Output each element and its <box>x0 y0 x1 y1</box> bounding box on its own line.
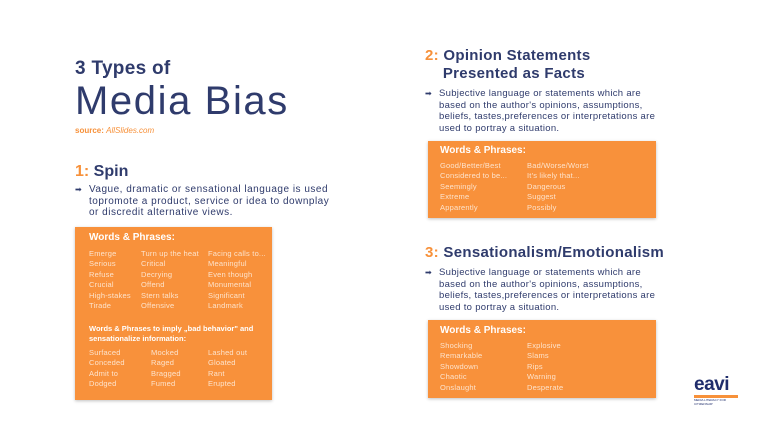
heading: spin: 1: Spin <box>75 163 128 180</box>
text: sensationalism description: used to portray a situation. <box>439 302 559 312</box>
panel: spin words: Landmark <box>208 301 243 310</box>
panel: spin words: Rant <box>208 369 225 378</box>
panel: spin words: Fumed <box>151 379 175 388</box>
panel: spin words: Emerge <box>89 249 116 258</box>
panel: spin words: Surfaced <box>89 348 121 357</box>
heading: sensationalism: 3: Sensationalism/Emotionalism <box>425 244 664 261</box>
text: opinion description: based on the author's opinions, assumptions, <box>439 100 643 110</box>
panel: sensationalism words: Desperate <box>527 383 563 392</box>
heading: opinion <box>425 47 590 82</box>
text: sensationalism description <box>425 267 655 313</box>
panel: sensationalism words <box>428 320 656 398</box>
text: sensationalism description: Subjective language or statements which are <box>439 267 641 278</box>
panel: opinion words: Words & Phrases: <box>440 145 526 156</box>
panel: opinion words: Suggest <box>527 192 556 201</box>
panel: sensationalism words: Rips <box>527 362 543 371</box>
text: spin description: or discredit alternative views. <box>89 207 233 218</box>
panel: opinion words: It's likely that... <box>527 171 580 180</box>
panel: spin words: Turn up the heat <box>141 249 199 258</box>
panel: spin words: Lashed out <box>208 348 247 357</box>
panel: opinion words: Bad/Worse/Worst <box>527 161 588 170</box>
panel: spin words: Refuse <box>89 270 114 279</box>
panel: spin words: Raged <box>151 358 174 367</box>
panel: opinion words: Seemingly <box>440 182 477 191</box>
panel: opinion words: Possibly <box>527 203 557 212</box>
logo: eavi: eavi <box>694 374 729 395</box>
title <box>75 58 289 135</box>
panel: sensationalism words: Remarkable <box>440 351 482 360</box>
panel: sensationalism words: Explosive <box>527 341 561 350</box>
panel: opinion words: Considered to be... <box>440 171 507 180</box>
panel: spin words: Meaningful <box>208 259 247 268</box>
title: Media Bias <box>75 79 289 123</box>
panel: spin words: Stern talks <box>141 291 179 300</box>
text: opinion description: Subjective language or statements which are <box>439 88 641 99</box>
panel: spin words: Crucial <box>89 280 114 289</box>
panel: spin words: Dodged <box>89 379 116 388</box>
logo: eavi: MEDIA LITERACY FOR CITIZENSHIP <box>694 398 726 406</box>
panel: opinion words <box>428 141 656 218</box>
panel: sensationalism words: Chaotic <box>440 372 467 381</box>
panel: spin words: Monumental <box>208 280 251 289</box>
panel: opinion words: Extreme <box>440 192 469 201</box>
panel: sensationalism words: Warning <box>527 372 556 381</box>
panel: spin words: High-stakes <box>89 291 131 300</box>
panel: spin words: Words & Phrases to imply „bad behavior" and sensationalize information: <box>89 324 253 343</box>
text: spin description: topromote a product, service or idea to downplay <box>89 196 329 206</box>
title: 3 Types of <box>75 58 171 79</box>
panel: spin words: Serious <box>89 259 116 268</box>
panel: sensationalism words: Onslaught <box>440 383 476 392</box>
panel: spin words: Even though <box>208 270 252 279</box>
logo: eavi <box>694 374 738 406</box>
panel: sensationalism words: Shocking <box>440 341 472 350</box>
panel: spin words: Facing calls to... <box>208 249 266 258</box>
heading: opinion: 2: Opinion Statements <box>425 47 590 64</box>
panel: spin words <box>75 227 272 400</box>
panel: spin words: Tirade <box>89 301 111 310</box>
panel: spin words: Mocked <box>151 348 178 357</box>
panel: spin words: Offensive <box>141 301 174 310</box>
text: opinion description <box>425 88 655 134</box>
panel: spin words: Erupted <box>208 379 236 388</box>
panel: spin words: Significant <box>208 291 245 300</box>
panel: opinion words: Good/Better/Best <box>440 161 501 170</box>
panel: spin words: Decrying <box>141 270 172 279</box>
heading: opinion: Presented as Facts <box>443 65 585 82</box>
panel: spin words: Gloated <box>208 358 236 367</box>
text: spin description <box>75 184 329 218</box>
panel: spin words: Critical <box>141 259 166 268</box>
text: opinion description: used to portray a situation. <box>439 122 559 134</box>
panel: spin words: Conceded <box>89 358 125 367</box>
title: source: AllSlides.com <box>75 126 154 135</box>
text: sensationalism description: based on the author's opinions, assumptions, <box>439 278 643 290</box>
panel: opinion words: Apparently <box>440 203 478 212</box>
panel: spin words: Admit to <box>89 369 118 378</box>
text: sensationalism description: beliefs, tastes,preferences or interpretations are <box>439 290 655 301</box>
panel: sensationalism words: Words & Phrases: <box>440 325 526 336</box>
panel: spin words: Offend <box>141 280 165 289</box>
text: opinion description: beliefs, tastes,preferences or interpretations are <box>439 111 655 122</box>
panel: sensationalism words: Showdown <box>440 362 478 371</box>
text: spin description: Vague, dramatic or sensational language is used <box>89 184 328 195</box>
panel: opinion words: Dangerous <box>527 182 566 191</box>
panel: sensationalism words: Slams <box>527 351 549 360</box>
panel: spin words: Words & Phrases: <box>89 232 175 243</box>
panel: spin words: Bragged <box>151 369 181 378</box>
